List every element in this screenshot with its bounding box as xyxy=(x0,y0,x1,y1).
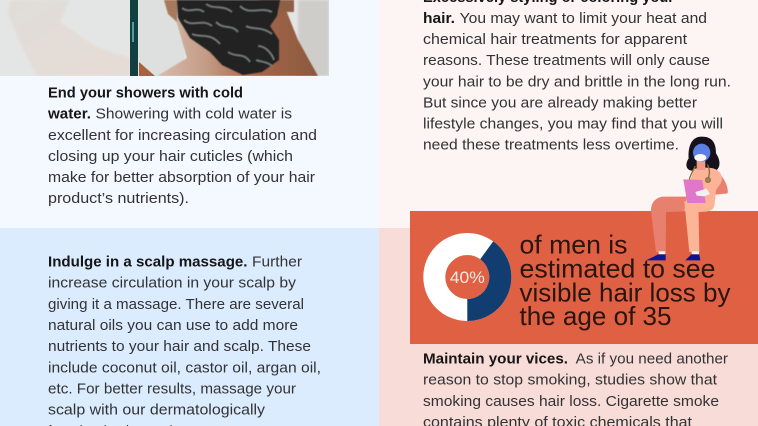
text block: indulge in a scalp massage: natural oils you can use to add more xyxy=(48,318,298,334)
text block: indulge in a scalp massage: include coconut oil, castor oil, argan oil, xyxy=(48,360,321,376)
text block: excessively styling or coloring your hair: But since you are already making better xyxy=(423,95,697,111)
panel: hair loss statistic xyxy=(410,211,758,344)
donut chart: 40 percent xyxy=(434,241,511,321)
text block: excessively styling or coloring your hair: reasons. These treatments will only cause xyxy=(423,53,710,69)
statistic background xyxy=(410,211,758,344)
text block: excessively styling or coloring your hair: lifestyle changes, you may find that you will xyxy=(423,116,723,132)
donut chart: 40 percent: 40% xyxy=(450,269,485,287)
panel: shower tip background xyxy=(0,0,379,228)
text block: end your showers with cold water: excellent for increasing circulation and xyxy=(48,128,317,144)
neck xyxy=(697,160,705,170)
text block: indulge in a scalp massage: increase circulation in your scalp by xyxy=(48,276,297,292)
text block: maintain your vices: As if you need another xyxy=(576,352,728,368)
text block: end your showers with cold water: End your showers with cold xyxy=(48,86,243,102)
text block: end your showers with cold water: make for better absorption of your hair xyxy=(48,170,315,186)
text block: end your showers with cold water: Showering with cold water is xyxy=(96,107,292,123)
hair xyxy=(686,137,720,172)
panel: styling tip background xyxy=(379,0,758,228)
text block: excessively styling or coloring your hair: You may want to limit your heat and xyxy=(460,11,707,27)
text block: end your showers with cold water: product’s nutrients). xyxy=(48,191,189,207)
text block: end your showers with cold water xyxy=(47,86,317,207)
front leg xyxy=(684,201,699,252)
text block: indulge in a scalp massage: giving it a massage. There are several xyxy=(48,297,304,313)
text block: indulge in a scalp massage xyxy=(48,254,321,426)
text block: excessively styling or coloring your hair: need these treatments less overtime. xyxy=(423,138,679,154)
clipboard xyxy=(683,179,706,203)
panel: vices background xyxy=(379,228,758,426)
statistic caption: of men is xyxy=(520,229,628,259)
statistic caption xyxy=(520,229,730,331)
left shoe xyxy=(646,254,666,260)
illustration: seated doctor with clipboard xyxy=(646,137,728,260)
text block: excessively styling or coloring your hair: your hair to be dry and brittle in the long run. xyxy=(423,74,731,90)
text block: maintain your vices: Maintain your vices. xyxy=(423,352,568,368)
far arm xyxy=(709,169,728,195)
statistic caption: estimated to see xyxy=(520,253,716,283)
glove xyxy=(695,189,710,196)
right shoe xyxy=(685,254,700,260)
photo: man washing hair in the shower xyxy=(0,0,329,76)
text block: maintain your vices xyxy=(423,352,728,426)
text block: indulge in a scalp massage: nutrients to your hair and scalp. These xyxy=(48,339,311,355)
text block: indulge in a scalp massage: scalp with our dermatologically xyxy=(48,403,266,419)
text block: indulge in a scalp massage: etc. For better results, massage your xyxy=(48,382,296,398)
text block: maintain your vices: reason to stop smoking, studies show that xyxy=(423,373,717,389)
text block: end your showers with cold water: water. xyxy=(47,107,91,123)
statistic caption: visible hair loss by xyxy=(520,278,730,308)
back leg xyxy=(651,197,687,252)
text block: indulge in a scalp massage: Further xyxy=(252,254,302,270)
text block: end your showers with cold water: closing up your hair cuticles (which xyxy=(48,149,293,165)
panel: scalp massage background xyxy=(0,228,379,426)
socks xyxy=(659,251,665,254)
face xyxy=(693,144,710,162)
statistic caption: the age of 35 xyxy=(520,301,672,331)
text block: excessively styling or coloring your hair: hair. xyxy=(423,11,455,27)
text block: maintain your vices: smoking causes hair loss. Cigarette smoke xyxy=(423,394,719,410)
torso xyxy=(684,168,722,212)
text block: excessively styling or coloring your hair xyxy=(423,0,731,154)
text block: excessively styling or coloring your hair: chemical hair treatments for apparent xyxy=(423,32,687,48)
stethoscope xyxy=(689,165,710,182)
text block: indulge in a scalp massage: Indulge in a scalp massage. xyxy=(48,254,248,270)
face mask xyxy=(694,154,706,161)
